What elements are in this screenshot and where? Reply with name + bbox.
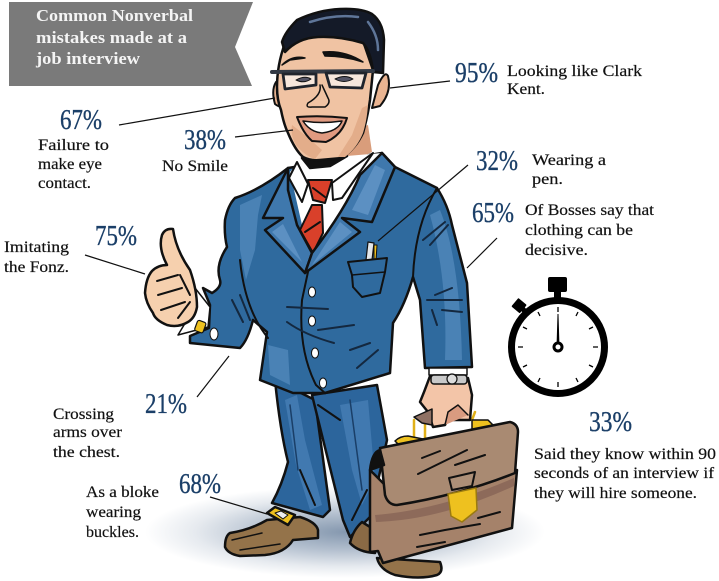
stat: 75% the Fonz xyxy=(4,221,137,276)
jacket xyxy=(190,153,472,393)
stat: 21% crossing arms xyxy=(53,389,187,461)
stat: 65% clothing: Of Bosses say that xyxy=(525,202,655,219)
stat: 95% Clark Kent: Looking like Clark xyxy=(507,63,642,80)
stat: 32% pen: Wearing a xyxy=(532,152,606,169)
title banner: job interview xyxy=(35,49,141,68)
stat: 65% clothing: decisive. xyxy=(525,242,588,259)
title banner: Common Nonverbal xyxy=(36,6,193,25)
stat: 95% Clark Kent xyxy=(455,58,642,98)
stat: 65% clothing: 65% xyxy=(472,198,514,229)
stat: 21% crossing arms: arms over xyxy=(53,424,123,441)
stat: 68% buckles xyxy=(86,469,221,541)
briefcase xyxy=(370,412,518,563)
neck xyxy=(300,125,372,170)
stat: 67% eye contact xyxy=(38,105,109,192)
stat: 21% crossing arms: Crossing xyxy=(53,406,114,423)
stat: 95% Clark Kent: 95% xyxy=(455,58,498,89)
breast pocket with pens xyxy=(348,242,387,297)
stat: 67% eye contact: 67% xyxy=(60,105,102,136)
stat: 65% clothing xyxy=(472,198,655,259)
thumbs up hand xyxy=(145,229,197,326)
stat: 67% eye contact: contact. xyxy=(38,175,91,192)
smile xyxy=(297,116,347,142)
stat: 33% hiring decision: Said they know within 90 xyxy=(534,446,716,463)
stat: 68% buckles: wearing xyxy=(86,504,141,521)
icon: stopwatch xyxy=(511,277,604,394)
shirt and collar xyxy=(289,153,382,253)
stat: 38% no smile xyxy=(162,125,228,175)
stat: 32% pen: 32% xyxy=(476,146,518,177)
trousers xyxy=(272,380,387,537)
stat: 21% crossing arms: 21% xyxy=(145,389,187,420)
leader lines xyxy=(85,81,497,514)
stat: 33% hiring decision: 33% xyxy=(589,407,632,438)
shirt cuffs and watch xyxy=(178,288,467,384)
lapels xyxy=(263,153,395,273)
jacket buttons xyxy=(210,287,326,388)
stat: 75% the Fonz: the Fonz. xyxy=(4,259,69,276)
stat: 75% the Fonz: 75% xyxy=(95,221,137,252)
stat: 67% eye contact: Failure to xyxy=(38,137,109,154)
stat: 75% the Fonz: Imitating xyxy=(4,239,69,256)
title banner xyxy=(9,2,253,86)
stat: 65% clothing: clothing can be xyxy=(525,222,633,239)
hair xyxy=(282,9,384,73)
stat: 95% Clark Kent: Kent. xyxy=(507,81,545,98)
floor shadow xyxy=(145,486,545,578)
stat: 33% hiring decision: seconds of an interview if xyxy=(534,465,715,482)
glasses xyxy=(272,71,373,89)
stat: 67% eye contact: make eye xyxy=(38,156,102,173)
head xyxy=(272,9,389,168)
stat: 68% buckles: 68% xyxy=(179,469,221,500)
stat: 32% pen xyxy=(476,146,606,188)
title banner: mistakes made at a xyxy=(36,28,188,47)
right hand with watch xyxy=(414,376,472,427)
stat: 32% pen: pen. xyxy=(532,171,563,188)
left shoe with buckle xyxy=(225,507,318,556)
stat: 33% hiring decision: they will hire someone. xyxy=(534,485,697,502)
stat: 68% buckles: As a bloke xyxy=(86,484,159,501)
stat: 68% buckles: buckles. xyxy=(86,524,139,541)
stat: 38% no smile: 38% xyxy=(184,125,226,156)
red tie xyxy=(300,180,332,253)
eyebrows xyxy=(282,52,363,65)
stat: 21% crossing arms: the chest. xyxy=(53,444,120,461)
right shoe xyxy=(350,522,441,578)
stat: 33% hiring decision xyxy=(534,407,716,502)
stat: 38% no smile: No Smile xyxy=(162,158,228,175)
nose xyxy=(307,85,329,107)
businessman illustration xyxy=(145,9,518,578)
